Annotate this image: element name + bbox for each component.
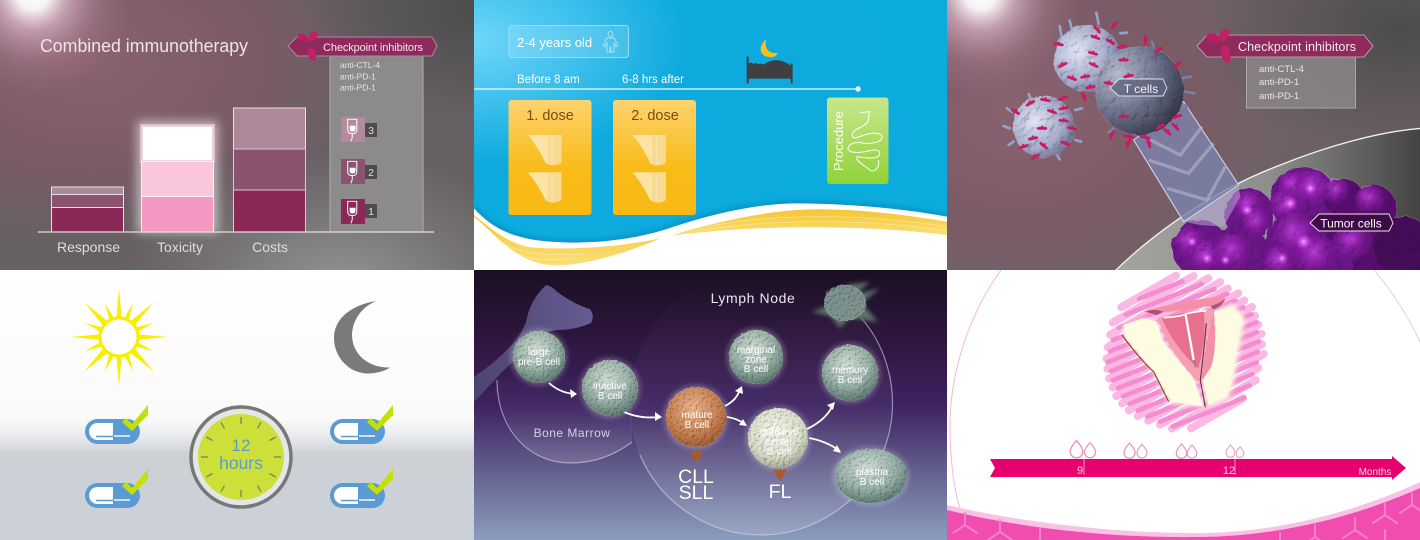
panel: combined immunotherapy chart: [0, 0, 474, 270]
box: inhibitor list: anti-CTL-4: [1259, 64, 1304, 75]
panel: IUD timeline: [947, 251, 1420, 540]
age badge: [509, 26, 628, 58]
label: T cells: [1110, 79, 1167, 96]
infusion dose 1: [341, 199, 377, 224]
panel: dosing timeline: [474, 0, 947, 270]
cell: plasma B: plasma: [856, 467, 889, 478]
icon: moon: [334, 301, 390, 374]
box: inhibitor list: [1246, 55, 1356, 108]
column: checkpoint inhibitor list: [330, 50, 423, 232]
T cell: large: [1095, 42, 1194, 135]
marker: CLL / SLL: [678, 452, 714, 504]
cell: marginal zone B: marginal: [737, 345, 775, 356]
card: dose 1: [508, 100, 592, 215]
axis labels: Costs: [252, 239, 288, 255]
patterned footer: [947, 482, 1420, 540]
T cell: small: [1004, 94, 1082, 159]
cell: plasma B: [832, 446, 910, 506]
panel: twice daily dosing: [0, 270, 474, 540]
ribbon: checkpoint inhibitors: Checkpoint inhibitors: [1238, 40, 1356, 54]
timeline labels: Before 8 am: [517, 74, 580, 86]
lymph node thumbnail: [812, 282, 880, 328]
icon: sun: [70, 288, 168, 386]
marker: FL: FL: [769, 481, 792, 503]
frame curves: [950, 270, 1001, 508]
cell: germinal center B: [745, 405, 811, 471]
card: dose 1: 1. dose: [526, 108, 574, 124]
bar: response: [52, 187, 124, 232]
timeline line: [474, 86, 861, 92]
infusion dose 2: [341, 159, 377, 184]
label: tumor cells: [1310, 214, 1393, 231]
icon: child: [603, 32, 618, 52]
marker: FL: [769, 470, 792, 503]
card: procedure: Procedure: [831, 111, 846, 171]
timeline arrow: 9: [1077, 465, 1083, 477]
cell: marginal zone B: B cell: [744, 364, 768, 375]
cell: germinal center B: germinal: [760, 427, 798, 438]
panel: T cells and tumor cells: [947, 0, 1420, 270]
cell: mature B: [663, 384, 729, 450]
scribble background: [1079, 251, 1289, 453]
bar: costs: [234, 108, 306, 232]
migration beam: [1134, 102, 1240, 227]
column: checkpoint inhibitor list: anti-PD-1: [340, 82, 376, 92]
timeline labels: 6-8 hrs after: [622, 74, 684, 86]
panel: B cell development: [474, 270, 947, 540]
age badge: 2-4 years old: [517, 35, 592, 50]
bone marrow outline: [497, 380, 632, 463]
cell: germinal center B: center: [765, 437, 794, 448]
icon: pill evening 1: [330, 405, 393, 444]
cell: memory B: [819, 342, 881, 404]
ribbon: checkpoint inhibitors: Checkpoint inhibitors: [323, 42, 424, 54]
cell: large pre-B: [510, 328, 568, 386]
clock: 12 hours: 12: [232, 436, 250, 455]
cell: large pre-B: pre-B cell: [518, 357, 560, 368]
timeline arrow: 12: [1223, 465, 1235, 477]
marker: CLL / SLL: CLL: [678, 466, 714, 488]
frame curve right: [1374, 270, 1420, 342]
infusion dose 2: 2: [368, 167, 374, 179]
ribbon: checkpoint inhibitors: [288, 29, 437, 62]
tumor cell cluster: [1170, 166, 1420, 270]
box: inhibitor list: anti-PD-1: [1259, 77, 1299, 88]
column: checkpoint inhibitor list: anti-CTL-4: [340, 60, 380, 70]
cell: mature B: mature: [681, 410, 713, 421]
icon: pill morning 1: [85, 405, 148, 444]
tissue surface curve: [1115, 128, 1420, 271]
tumor highlights: [1187, 182, 1317, 265]
timeline arrow: Months: [1359, 467, 1391, 478]
bar: toxicity (highlighted): [137, 121, 218, 233]
timeline labels: [518, 74, 684, 83]
cell: mature B: B cell: [685, 420, 709, 431]
label: lymph node: Lymph Node: [711, 290, 795, 306]
axis labels: [58, 242, 288, 255]
cell: germinal center B: B cell: [767, 446, 791, 458]
cell: inactive B: [579, 357, 641, 419]
wave footer: [474, 203, 947, 270]
box: inhibitor list: anti-PD-1: [1259, 91, 1299, 102]
bone marrow region: [497, 370, 632, 463]
uterus illustration: [1122, 297, 1245, 407]
column: checkpoint inhibitor list: anti-PD-1: [340, 72, 376, 82]
infusion dose 1: 1: [368, 206, 374, 218]
card: procedure: [827, 98, 888, 184]
lymph node region: [629, 271, 893, 535]
icon: pill evening 2: [330, 469, 393, 508]
T cell: middle: [1054, 13, 1127, 92]
icon: bed and moon: [747, 39, 793, 83]
icon: pill morning 2: [85, 469, 148, 508]
clock: 12 hours: hours: [219, 453, 263, 473]
marker: CLL / SLL: SLL: [679, 482, 713, 504]
icon: intestine: [848, 112, 882, 171]
title: Combined immunotherapy: [40, 35, 249, 56]
infusion dose 3: [341, 117, 377, 142]
label: T cells: T cells: [1124, 82, 1158, 96]
infusion dose 3: 3: [368, 125, 374, 137]
cell: memory B: B cell: [838, 375, 862, 386]
arrows: [549, 383, 841, 453]
cell: marginal zone B: zone: [745, 354, 767, 366]
cell: memory B: memory: [832, 365, 868, 376]
cell: inactive B: inactive: [593, 381, 627, 392]
ribbon: checkpoint inhibitors: [1197, 27, 1373, 64]
card: dose 2: 2. dose: [631, 108, 679, 124]
cell: marginal zone B: [726, 327, 786, 387]
bone: [474, 285, 593, 402]
chart baseline: [38, 231, 434, 233]
cell: plasma B: B cell: [860, 477, 884, 488]
cell: large pre-B: large: [528, 347, 551, 358]
antibodies on T cells: [1010, 19, 1183, 161]
axis labels: Toxicity: [157, 239, 203, 255]
menses drops: [1070, 441, 1244, 458]
axis labels: Response: [57, 239, 120, 255]
label: tumor cells: Tumor cells: [1320, 216, 1382, 230]
label: bone marrow: Bone Marrow: [534, 426, 610, 440]
timeline arrow: [990, 456, 1406, 480]
cell: inactive B: B cell: [598, 391, 622, 402]
clock: 12 hours: [191, 407, 291, 507]
card: dose 2: [613, 100, 696, 215]
